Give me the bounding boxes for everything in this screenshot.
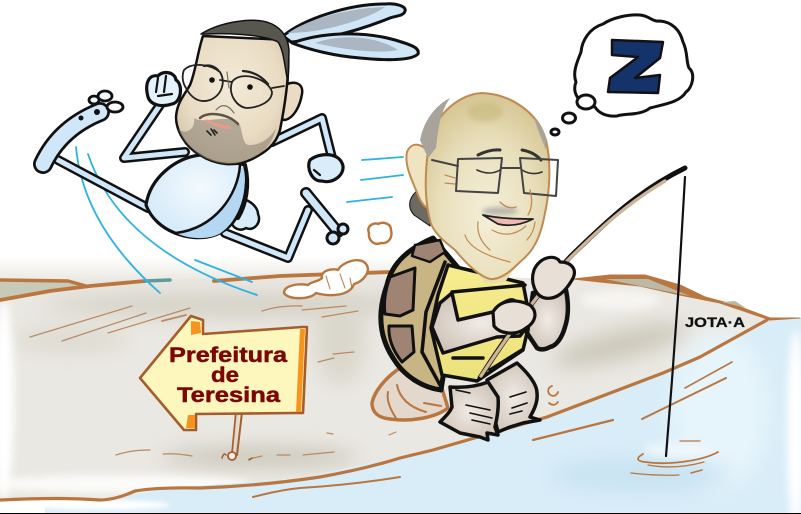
- turtle nose lines: [500, 190, 532, 215]
- sand marks near turtle: [548, 386, 558, 405]
- sign board: [140, 316, 307, 430]
- rabbit belly: [146, 155, 247, 238]
- sign text: Prefeitura: [169, 343, 288, 367]
- rabbit character: [43, 4, 418, 258]
- rabbit eyebrows: [204, 66, 268, 84]
- turtle legs: [440, 363, 540, 440]
- rabbit right arm: [272, 118, 343, 182]
- speed lines: [76, 147, 403, 295]
- turtle glasses: [432, 158, 558, 196]
- signature: JOTA·A: [685, 314, 745, 330]
- turtle tail: [372, 368, 448, 420]
- rabbit ears: [283, 4, 418, 60]
- sign text: Teresina: [177, 383, 281, 407]
- turtle shirt: [431, 265, 530, 381]
- sign post: [222, 412, 252, 460]
- rabbit tail: [232, 199, 259, 230]
- sand strokes: [30, 306, 396, 459]
- rabbit nose and mouth: [200, 72, 238, 135]
- fishing line: [666, 177, 685, 456]
- water ripples: [631, 441, 718, 475]
- sand beach: [0, 256, 768, 500]
- rabbit eyes: [209, 77, 253, 90]
- direction sign: [140, 316, 307, 460]
- rabbit back leg: [43, 91, 148, 208]
- thought dots: [551, 95, 595, 135]
- turtle lower hand: [493, 301, 535, 333]
- horizon and shore lines: [0, 272, 800, 500]
- dust clouds: [284, 223, 391, 298]
- turtle wrinkles: [445, 175, 535, 262]
- turtle neck: [470, 258, 522, 284]
- head shading: [467, 102, 503, 122]
- grey side hair: [420, 98, 546, 158]
- bubble cloud: [575, 15, 693, 116]
- rabbit face: [176, 36, 288, 164]
- rabbit front leg: [225, 193, 348, 258]
- rabbit head: [176, 20, 302, 164]
- turtle face: [426, 93, 549, 279]
- sign text: de: [211, 363, 239, 387]
- sign text: [169, 343, 288, 407]
- rabbit glasses: [183, 65, 284, 108]
- sign side faces: [186, 321, 305, 428]
- bottom border: [0, 513, 801, 514]
- turtle head: [406, 93, 558, 279]
- turtle far arm: [527, 290, 568, 349]
- thought bubble: [551, 15, 693, 135]
- turtle upper hand: [533, 257, 574, 298]
- turtle mouth: [483, 215, 533, 225]
- turtle near arm: [432, 293, 532, 353]
- turtle eyebrows: [478, 150, 541, 160]
- water: [30, 318, 801, 514]
- turtle shell: [381, 238, 460, 390]
- letter Z: [608, 40, 663, 93]
- turtle moustache: [482, 207, 518, 215]
- rabbit beard: [178, 118, 276, 164]
- turtle character: [372, 93, 685, 440]
- grey back hair: [410, 190, 432, 226]
- fishing rod: [480, 168, 685, 378]
- rabbit ear: [279, 83, 302, 120]
- turtle ear: [406, 145, 432, 208]
- turtle closed eyes: [477, 170, 542, 174]
- rabbit raised arm: [124, 73, 185, 158]
- rabbit hair: [201, 20, 289, 82]
